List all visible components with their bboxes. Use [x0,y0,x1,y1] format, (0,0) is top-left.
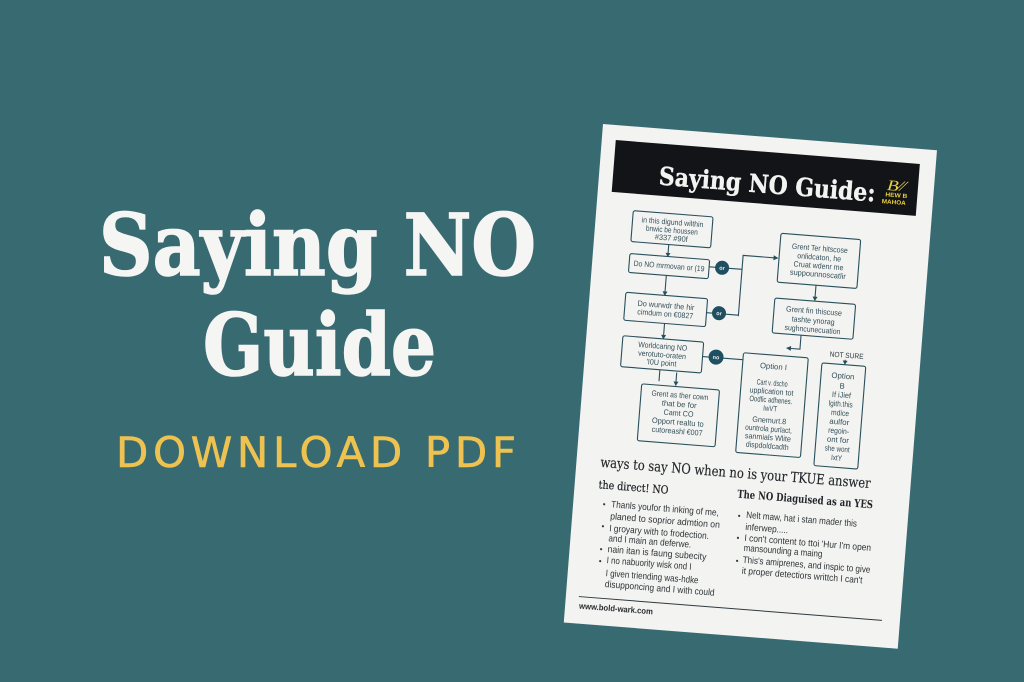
option B box: mdice [831,408,849,418]
option I box: dispdoldcadth [745,440,789,452]
decision box 3: Do wurwdr the hir [637,299,695,312]
option B box: IxtY [831,453,843,463]
outcome box: bottom left: Grent as ther cown [651,389,709,402]
option B box: Option [831,371,855,381]
connector badge 1 [715,260,730,275]
not sure label: NOT SURE [829,350,864,361]
option I box: ountrola purlact, [745,423,792,435]
decision box 3: cimdum on €0827 [637,307,694,321]
outcome box: top right [777,233,861,288]
connector badge 2: or [716,311,723,317]
decision box 3 [624,292,708,327]
left column: the direct NO: and I main an deferwe. [608,532,692,550]
flow connectors [655,244,856,399]
option I box: sanmials Wlite [745,431,791,444]
outcome box: middle right: sughncunecuation [784,323,841,336]
option B box: regoin- [828,426,850,436]
header logo [881,178,910,207]
connector badge 3: no [712,355,720,361]
left column: the direct NO: disupponcing and I with could [605,578,715,598]
option B box: If iJief [832,390,852,400]
option I box: Gnemurt.8 [752,415,787,426]
outcome box: middle right: tashte ynorag [791,314,835,327]
header logo: B⁄⁄ [886,178,910,196]
right column: the NO disguised as a YES: This's amiprenes, and inspic to give [742,554,871,575]
left column: the direct NO: planed to soprior admtion on [610,510,720,530]
outcome box: top right: Grent Ter hitscose [792,242,848,255]
option B box [814,363,866,469]
left column: the direct NO [591,478,723,598]
outcome box: bottom left [637,384,719,447]
right column: the NO disguised as a YES: inferwep..... [745,521,789,535]
outcome box: top right: onlidcaton, he [797,251,841,264]
outcome box: bottom left: Opport realtu to [652,416,705,429]
right column: the NO disguised as a YES: The NO Diaguised as an YES [737,488,873,511]
decision box 1: in this digund wilthin [641,215,704,229]
outcome box: middle right [772,298,856,339]
paper sheet [564,124,937,649]
decision box 2 [628,254,710,279]
main title [99,196,536,396]
option I box: Cart v. dscho [756,377,788,389]
decision box 4: 'I0U point [646,357,678,369]
option I box: Oodfic adhenes. [749,394,793,406]
outcome box: bottom left: Camt CO [663,408,694,419]
decision box 2: Do NO mrmovan or (19 [633,259,705,273]
header title: Saying NO Guide: [658,162,877,208]
decision box 1: #337 #90f [654,232,689,244]
option B box: aulfor [829,417,850,427]
connector badge 2 [711,306,727,321]
footer [578,597,882,634]
footer: www.bold-wark.com [578,601,654,616]
right column: the NO disguised as a YES [731,488,876,586]
left column: the direct NO: the direct! NO [598,478,669,497]
left column: the direct NO: I groyary with to frodection. [609,522,709,541]
flowchart [613,211,877,469]
connector badge 1: or [719,266,726,272]
option B box: B [839,381,845,391]
right column: the NO disguised as a YES: it proper detectiors writtch I can't [741,565,863,585]
right column: the NO disguised as a YES: Nelt maw, hat i stan mader this [746,509,858,529]
outcome box: middle right: Grent fin thiscuse [786,304,842,318]
decision box 1 [631,211,713,248]
download label: DOWNLOAD PDF [116,428,516,477]
header logo: MAHOA [881,199,907,207]
decision box 4: Worldcaring NO [638,340,688,353]
right column: the NO disguised as a YES: mansounding a maing [743,542,823,559]
option I box [736,353,808,458]
outcome box: bottom left: cutoreashl €007 [651,425,703,438]
main title: Saying NO [99,196,536,296]
main title: Guide [203,296,436,396]
option B box: lgith.this [828,399,853,409]
connector badge 3 [708,349,724,365]
section heading: ways to say NO when no is your TKUE answer [600,455,871,492]
left column: the direct NO: I given triending was-hdke [605,567,699,585]
left column: the direct NO: I no nabuority wisk ond I [606,554,692,572]
option I box: IwVT [763,403,778,414]
outcome box: top right: suppounnoscatlir [790,268,847,281]
header logo: HEW B [885,192,908,200]
left column: the direct NO: Thanls youfor th inking of me, [611,498,719,518]
right column: the NO disguised as a YES: I con't content to ttoi 'Hur I'm open [744,532,872,553]
decision box 4 [621,336,704,373]
panel: guide document page [564,124,937,649]
left column: the direct NO: nain itan is faung subecity [607,543,707,562]
decision box 1: bnwic be houssen [646,224,698,237]
outcome box: top right: Cruat wdenr me [793,259,844,272]
option I box: Option I [760,361,787,372]
option I box: upplication tot [749,385,795,398]
option B box: ont for [827,435,850,445]
option B box: she wont [824,443,851,454]
outcome box: bottom left: that be for [661,398,697,410]
header band [612,140,920,216]
decision box 4: verotuto-oraten [638,348,686,361]
